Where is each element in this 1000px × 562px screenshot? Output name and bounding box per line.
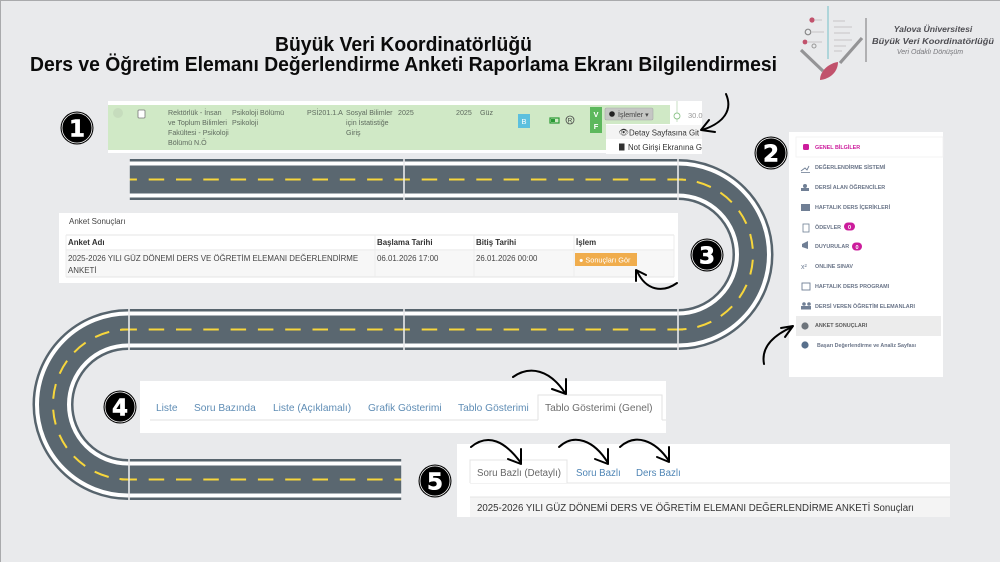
number badge 3: 3	[699, 244, 715, 270]
menu icons	[801, 166, 811, 349]
row text	[168, 108, 493, 147]
number badge 3	[690, 238, 724, 272]
status icons	[550, 116, 574, 124]
results table: 26.01.2026 00:00	[476, 254, 538, 263]
tab labels: Grafik Gösterimi	[368, 403, 442, 414]
title	[30, 34, 777, 76]
number badge 2	[754, 136, 788, 170]
badge B	[518, 114, 530, 128]
number badge 5: 5	[427, 470, 443, 496]
tab labels	[156, 403, 653, 414]
dropdown menu: Not Girişi Ekranına G	[628, 143, 702, 152]
menu labels: ANKET SONUÇLARI	[815, 323, 868, 329]
active tab	[538, 395, 662, 420]
badges V F: F	[594, 122, 599, 131]
results table: 06.01.2026 17:00	[377, 254, 439, 263]
row text: Sosyal Bilimler	[346, 109, 393, 117]
number badge 5	[418, 464, 452, 498]
panel: step 2 sidebar	[789, 132, 943, 377]
row text: ve Toplum Bilimleri	[168, 119, 227, 127]
menu labels: DERSİ ALAN ÖĞRENCİLER	[815, 183, 885, 191]
results table: ANKETİ	[68, 266, 96, 275]
road	[53, 159, 753, 500]
panel: step 4 tabs	[140, 381, 666, 433]
number badge 4: 4	[112, 396, 128, 422]
results table: Başlama Tarihi	[377, 238, 433, 247]
row text: Giriş	[346, 129, 361, 137]
dropdown menu: 👁︎	[618, 128, 629, 137]
menu labels: ÖDEVLER	[815, 224, 841, 231]
logo text: Veri Odaklı Dönüşüm	[897, 49, 963, 56]
row text: Psikoloji Bölümü	[232, 109, 284, 117]
arrow: step 1	[701, 94, 728, 132]
logo text: Büyük Veri Koordinatörlüğü	[872, 36, 995, 46]
count badges	[844, 222, 862, 251]
logo text	[872, 24, 995, 56]
row text: için İstatistiğe	[346, 118, 389, 127]
panel: step 3 survey results: Anket Sonuçları	[69, 217, 125, 226]
active tab	[470, 460, 567, 483]
menu labels: DERSİ VEREN ÖĞRETİM ELEMANLARI	[815, 302, 916, 310]
row text: Psikoloji	[232, 119, 258, 127]
tab labels: Soru Bazlı	[576, 468, 621, 479]
chart fragment: 30.0	[688, 111, 703, 120]
row icons	[113, 108, 145, 118]
results table	[66, 235, 674, 277]
highlighted menu item	[796, 316, 941, 336]
row text: Fakültesi - Psikoloji	[168, 129, 229, 137]
tab labels: Tablo Gösterimi (Genel)	[545, 403, 653, 414]
row text: Rektörlük - İnsan	[168, 108, 222, 117]
dropdown menu: Detay Sayfasına Git	[629, 128, 700, 138]
number badge 2: 2	[763, 142, 779, 168]
arrows: step 5	[471, 440, 669, 464]
menu labels: DEĞERLENDİRME SİSTEMİ	[815, 163, 886, 171]
tab labels: Ders Bazlı	[636, 468, 681, 479]
row text: Güz	[480, 109, 493, 117]
tab labels: Liste (Açıklamalı)	[273, 403, 351, 414]
logo mark	[801, 6, 866, 80]
results table: Bitiş Tarihi	[476, 238, 516, 247]
title: Büyük Veri Koordinatörlüğü	[275, 34, 532, 56]
menu labels: HAFTALIK DERS İÇERİKLERİ	[815, 204, 891, 211]
count badges: 0	[855, 245, 859, 251]
arrow: step 3	[636, 270, 677, 289]
tab labels	[477, 468, 681, 479]
menu labels: HAFTALIK DERS PROGRAMI	[815, 284, 890, 290]
results table: 2025-2026 YILI GÜZ DÖNEMİ DERS VE ÖĞRETİM ELEMANI DEĞERLENDİRME	[68, 254, 358, 263]
logo	[801, 6, 995, 80]
arrow: step 2	[764, 326, 793, 364]
button: view results	[575, 253, 637, 266]
number badge 1: 1	[69, 116, 85, 142]
menu labels: DUYURULAR	[815, 244, 849, 250]
results table: Anket Adı	[68, 238, 105, 247]
row text: PSİ201.1.A	[307, 108, 343, 117]
menu labels	[815, 163, 917, 349]
panel: step 3 survey results	[59, 213, 678, 283]
tab labels: Soru Bazında	[194, 403, 256, 414]
menu icons: x²	[801, 264, 808, 271]
dropdown menu	[606, 124, 702, 154]
tab labels: Liste	[156, 403, 178, 414]
actions button: İşlemler ▾	[618, 110, 649, 119]
row text: 2025	[398, 109, 414, 117]
results header	[470, 497, 950, 517]
panel: step 1 course row	[108, 101, 703, 154]
menu labels: Başarı Değerlendirme ve Analiz Sayfası	[817, 343, 917, 349]
badge B: B	[521, 117, 527, 126]
badges V F: V	[593, 110, 599, 119]
results header: 2025-2026 YILI GÜZ DÖNEMİ DERS VE ÖĞRETİM ELEMANI DEĞERLENDİRME ANKETİ Sonuçları	[477, 501, 914, 514]
row text: Bölümü N.Ö	[168, 139, 207, 147]
title: Ders ve Öğretim Elemanı Değerlendirme Anketi Raporlama Ekranı Bilgilendirmesi	[30, 53, 777, 76]
arrow: step 4	[513, 371, 566, 394]
active menu header: GENEL BİLGİLER	[815, 144, 860, 151]
number badge 1	[60, 112, 94, 144]
menu labels: ONLINE SINAV	[815, 264, 853, 270]
button: view results: ● Sonuçları Gör	[579, 256, 631, 264]
panel: step 5 tabs	[457, 444, 950, 517]
logo text: Yalova Üniversitesi	[894, 24, 973, 34]
count badges: 0	[848, 225, 851, 231]
status icons: R	[568, 118, 573, 124]
badges V F	[590, 107, 602, 133]
number badge 4	[104, 390, 136, 424]
actions button	[605, 108, 653, 120]
results table: İşlem	[576, 238, 596, 247]
active menu header	[796, 137, 943, 157]
tab labels: Soru Bazlı (Detaylı)	[477, 468, 561, 479]
row text: 2025	[456, 109, 472, 117]
tab labels: Tablo Gösterimi	[458, 403, 529, 414]
chart fragment	[674, 101, 703, 122]
